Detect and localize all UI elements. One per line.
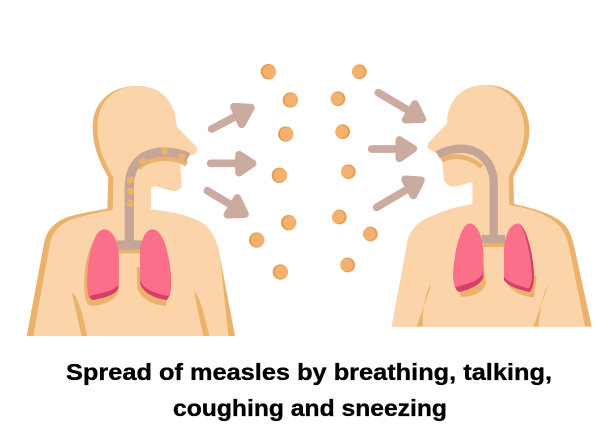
airway and trachea bbox=[438, 149, 505, 239]
arrows: incoming bbox=[372, 93, 422, 207]
body skin bbox=[33, 86, 228, 336]
body shadow bbox=[27, 86, 235, 336]
left lung bbox=[453, 224, 486, 297]
underarm folds bbox=[417, 284, 548, 327]
left lung bbox=[84, 229, 119, 306]
droplets: right group bbox=[331, 64, 378, 272]
caption: Spread of measles by breathing, talking, bbox=[66, 359, 552, 385]
airway shadow bbox=[442, 157, 505, 245]
right lung bbox=[137, 229, 171, 306]
airway shadow bbox=[117, 158, 187, 251]
right lung bbox=[504, 224, 537, 297]
underarm folds bbox=[72, 292, 209, 336]
droplets: left group bbox=[249, 64, 298, 280]
airway and trachea bbox=[117, 152, 188, 245]
droplets and arrows bbox=[207, 64, 422, 280]
caption bbox=[66, 359, 552, 421]
arrows: outgoing bbox=[207, 107, 253, 215]
droplets in airway bbox=[127, 147, 185, 207]
body shadow bbox=[392, 85, 592, 327]
caption: coughing and sneezing bbox=[173, 395, 447, 421]
person: left, exhaling bbox=[27, 86, 235, 336]
person: right, inhaling bbox=[392, 85, 592, 327]
body skin bbox=[392, 85, 585, 327]
